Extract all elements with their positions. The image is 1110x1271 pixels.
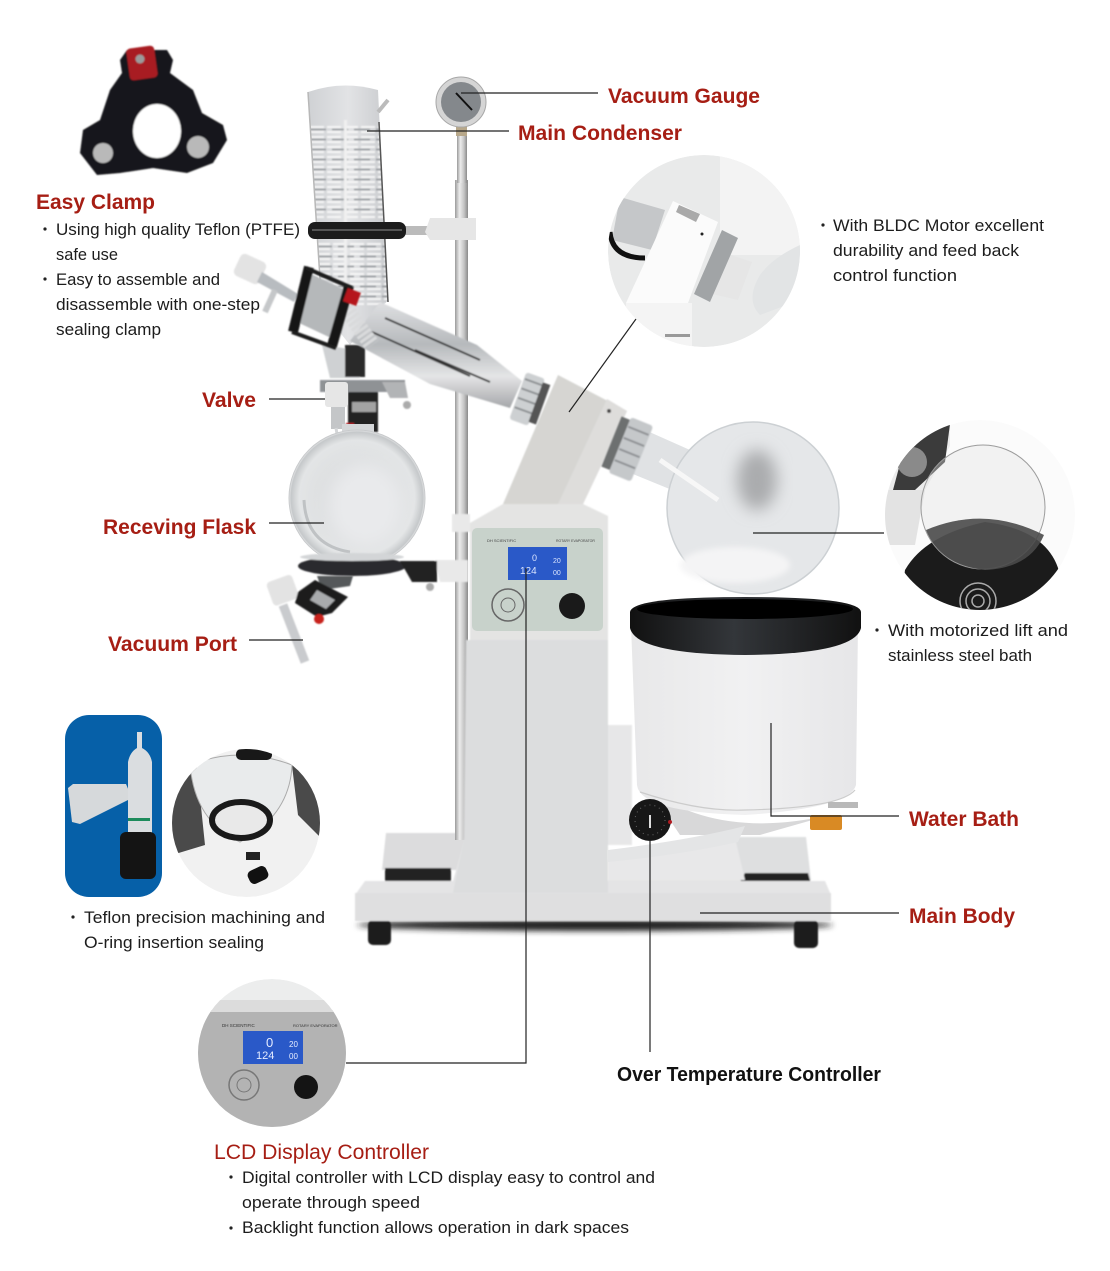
inset: motorized lift and bath — [885, 425, 1058, 610]
inset: LCD display close-up: DH SCIENTIFIC — [222, 1023, 256, 1028]
vacuum gauge — [436, 77, 486, 136]
text block: easy clamp bullets: Using high quality Teflon (PTFE) — [56, 220, 300, 239]
valve — [325, 382, 348, 452]
heading: main body: Main Body — [909, 905, 1015, 928]
inset: LCD display close-up: 124 — [256, 1050, 274, 1062]
text block: easy clamp bullets: Easy to assemble and — [56, 270, 220, 289]
condenser glass — [308, 85, 388, 345]
control panel — [472, 528, 603, 631]
heading: over temperature controller: Over Temperature Controller — [617, 1064, 881, 1086]
heading: vacuum gauge: Vacuum Gauge — [608, 85, 760, 108]
vapor duct — [340, 300, 522, 408]
heading: main condenser: Main Condenser — [518, 122, 682, 145]
condenser clamp — [308, 218, 476, 240]
flask holder — [298, 553, 468, 591]
inset: LCD display close-up: 20 — [289, 1040, 298, 1049]
inset: LCD display close-up: 0 — [266, 1035, 273, 1050]
text block: motorized lift: With motorized lift and — [888, 621, 1068, 640]
text block: BLDC motor: durability and feed back — [833, 241, 1020, 260]
inset: LCD display close-up: ROTARY EVAPORATOR — [293, 1023, 338, 1028]
control panel: 0 — [532, 553, 537, 563]
lower fittings — [320, 345, 411, 432]
control panel: 20 — [553, 558, 561, 565]
text block: easy clamp bullets — [43, 220, 300, 339]
main column — [452, 375, 632, 893]
text block: easy clamp bullets: safe use — [56, 245, 118, 264]
text block: BLDC motor: control function — [833, 266, 957, 285]
support rod — [455, 135, 468, 840]
duct collar — [509, 372, 552, 428]
vacuum port fitting — [266, 574, 353, 662]
receiving flask — [289, 424, 425, 566]
heading: LCD display controller: LCD Display Controller — [214, 1141, 429, 1164]
inset: LCD display close-up — [198, 979, 348, 1130]
leader lines — [249, 93, 899, 1063]
text block: LCD bullets: operate through speed — [242, 1193, 420, 1212]
inset: teflon sealing close-up — [172, 749, 321, 897]
heading: water bath: Water Bath — [909, 808, 1019, 831]
water bath — [608, 597, 861, 862]
over temperature controller dial — [629, 799, 672, 841]
main body: base — [355, 833, 833, 948]
text block: LCD bullets — [229, 1168, 655, 1237]
heading: receiving flask: Receving Flask — [103, 516, 256, 539]
text block: LCD bullets: Digital controller with LCD display easy to control and — [242, 1168, 655, 1187]
evaporating flask collar — [600, 414, 653, 482]
text block: motorized lift — [875, 621, 1068, 665]
control panel: 124 — [520, 566, 537, 577]
heading: vacuum port: Vacuum Port — [108, 633, 237, 656]
inset: BLDC motor close-up — [608, 155, 800, 347]
text block: easy clamp bullets: disassemble with one-step — [56, 295, 260, 314]
text block: BLDC motor — [821, 216, 1044, 285]
text block: motorized lift: stainless steel bath — [888, 646, 1032, 665]
control panel: DH SCIENTIFIC — [487, 538, 516, 543]
icon: easy clamp photo — [80, 45, 227, 175]
top flange and cap — [232, 252, 361, 348]
text block: teflon sealing: Teflon precision machining and — [84, 908, 325, 927]
text block: LCD bullets: Backlight function allows operation in dark spaces — [242, 1218, 629, 1237]
text block: teflon sealing — [71, 908, 325, 952]
control panel: 00 — [553, 570, 561, 577]
inset: LCD display close-up: 00 — [289, 1052, 298, 1061]
text block: teflon sealing: O-ring insertion sealing — [84, 933, 264, 952]
control panel: ROTARY EVAPORATOR — [556, 539, 595, 543]
illustration: rotary evaporator — [232, 77, 861, 948]
heading: valve: Valve — [202, 389, 256, 412]
text block: BLDC motor: With BLDC Motor excellent — [833, 216, 1044, 235]
inset: blue card with teflon part — [65, 715, 162, 897]
text block: easy clamp bullets: sealing clamp — [56, 320, 161, 339]
heading: easy clamp: Easy Clamp — [36, 191, 155, 214]
evaporating flask — [628, 422, 839, 594]
